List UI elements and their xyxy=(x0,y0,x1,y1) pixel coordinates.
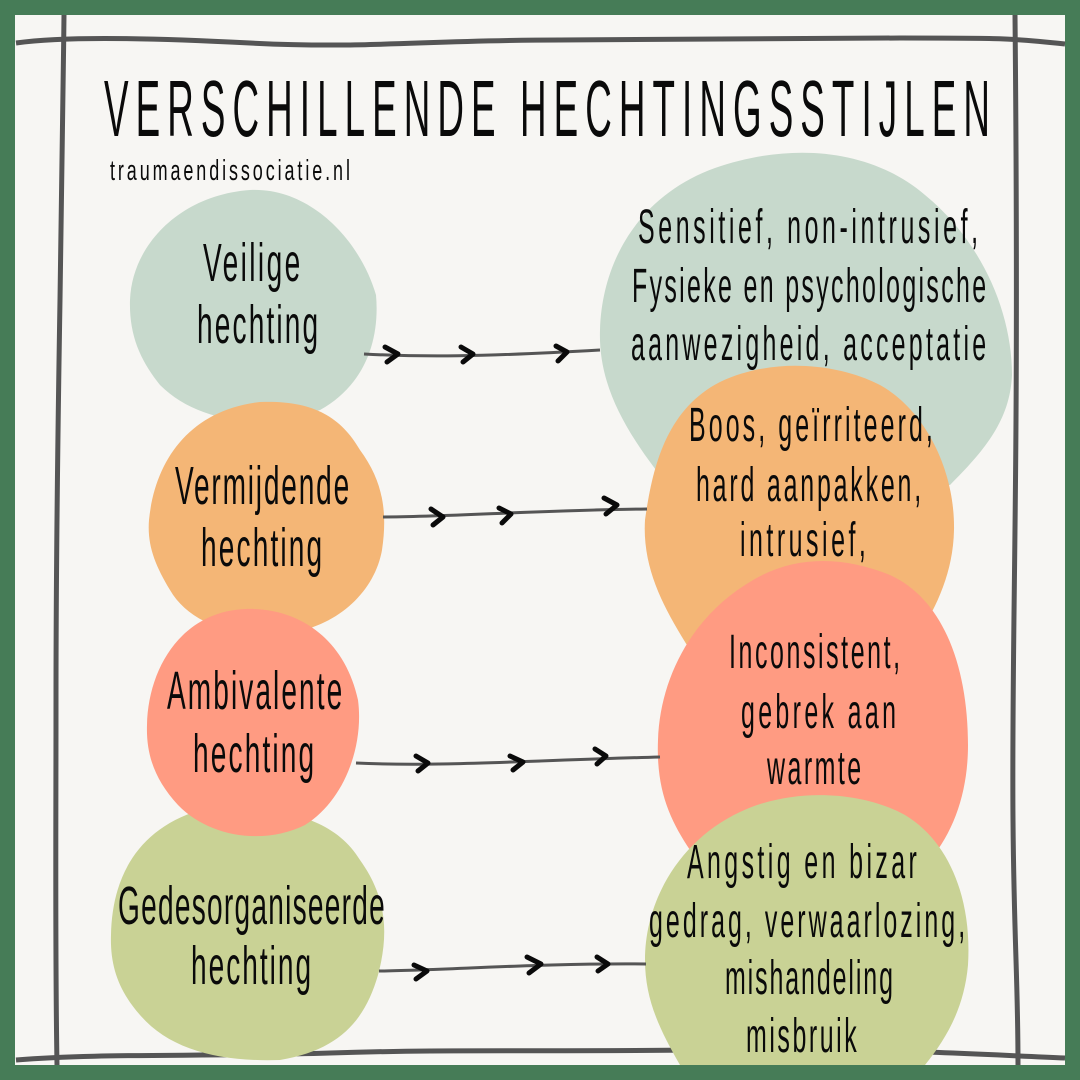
left labels: Gedesorganiseerde xyxy=(118,876,385,937)
left labels: hechting xyxy=(193,724,314,785)
left labels xyxy=(118,233,385,997)
arrowheads xyxy=(385,346,617,979)
left blob: olive xyxy=(111,808,384,1060)
left labels: Veilige xyxy=(203,233,300,294)
title: VERSCHILLENDE HECHTINGSSTIJLEN xyxy=(104,65,990,154)
right labels: Inconsistent, xyxy=(729,625,900,679)
right labels: Sensitief, non-intrusief, xyxy=(638,200,978,254)
right blob: olive xyxy=(645,795,968,1065)
right labels: mishandeling xyxy=(725,951,893,1005)
left labels: hechting xyxy=(197,295,318,356)
website: traumaendissociatie.nl xyxy=(110,155,350,187)
right labels: intrusief, xyxy=(740,513,866,567)
left blob: green xyxy=(130,190,377,421)
left labels: hechting xyxy=(201,518,322,579)
right labels: Angstig en bizar xyxy=(687,835,917,889)
panel: right blobs xyxy=(600,153,1012,1065)
left labels: hechting xyxy=(191,936,311,997)
left labels: Vermijdende xyxy=(175,456,349,517)
right labels: warmte xyxy=(766,741,861,795)
panel: left blobs xyxy=(111,190,384,1060)
right labels: aanwezigheid, acceptatie xyxy=(631,317,986,371)
right labels: Fysieke en psychologische xyxy=(632,259,986,313)
right blob: orange xyxy=(645,366,954,655)
right labels: Boos, geïrriteerd, xyxy=(689,398,933,452)
right blob: red xyxy=(658,561,968,860)
right labels: misbruik xyxy=(746,1009,857,1063)
right labels: gedrag, verwaarlozing, xyxy=(649,894,965,948)
right labels: gebrek aan xyxy=(741,685,896,739)
left blob: orange xyxy=(149,402,384,635)
arrows xyxy=(356,350,660,971)
right blob: green xyxy=(600,153,1012,500)
right labels: hard aanpakken, xyxy=(696,458,921,512)
right labels xyxy=(631,200,986,1063)
left labels: Ambivalente xyxy=(167,661,342,722)
left blob: red xyxy=(147,609,359,836)
